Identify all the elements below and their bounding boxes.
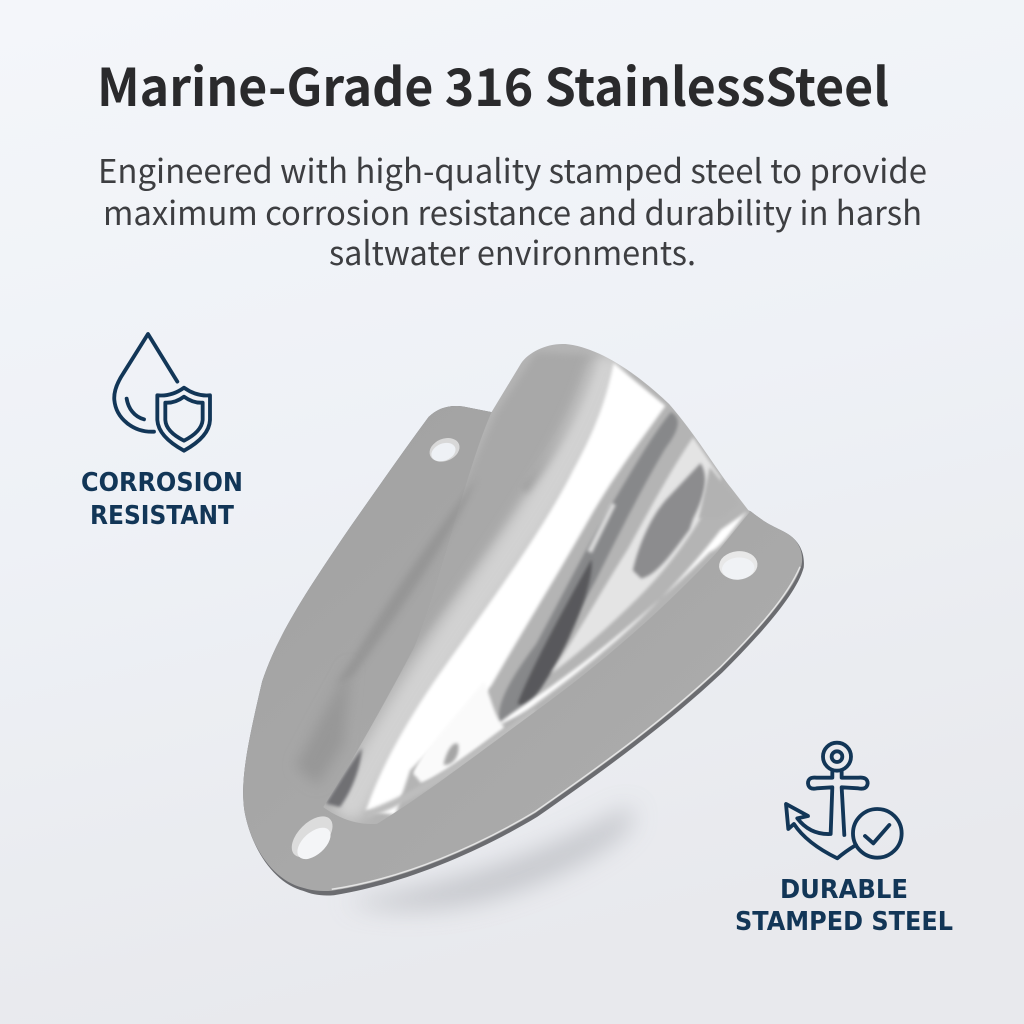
product photo: stainless steel clam vent [243, 330, 804, 909]
grey right flank [698, 467, 720, 519]
plate [243, 406, 802, 891]
white streak in channel [590, 504, 614, 552]
lower white band and tongue [414, 511, 748, 774]
icon: anchor with check [786, 743, 902, 858]
plate edge [243, 406, 804, 896]
bottom-left dark crease [326, 748, 362, 807]
label: durable stamped steel [735, 875, 953, 937]
light inner ridge [551, 437, 721, 674]
lower silver rim of hump [366, 711, 536, 815]
label: durable stamped steel: DURABLE [780, 875, 908, 905]
left shoulder shading [415, 354, 590, 646]
pale band [351, 371, 606, 803]
description text: saltwater environments. [329, 227, 696, 275]
white rim along lower edge [332, 567, 800, 889]
infographic canvas [82, 64, 952, 936]
darkest channel core [517, 559, 592, 705]
mounting hole bottom [284, 809, 340, 865]
tip reflection [443, 743, 459, 765]
soft dark area on the lower left plate [295, 663, 351, 785]
feature: corrosion resistant [81, 334, 243, 531]
description text [98, 145, 927, 275]
label: corrosion resistant: CORROSION [81, 468, 243, 498]
main white highlight [366, 363, 665, 815]
soft grey crease beside highlight [524, 456, 551, 492]
label: durable stamped steel: STAMPED STEEL [735, 907, 953, 937]
title: Marine-Grade 316 StainlessSteel [97, 46, 889, 121]
ground shadow [344, 807, 633, 909]
dark inner channel [499, 412, 678, 723]
mounting hole top [426, 434, 463, 466]
left soft shadow on plate [337, 478, 477, 685]
lower tongue fill [414, 681, 504, 783]
hump [324, 344, 750, 824]
mounting hole right [718, 550, 759, 581]
icon: water drop with shield [114, 334, 210, 451]
description text: maximum corrosion resistance and durability in harsh [103, 187, 922, 235]
label: corrosion resistant [81, 468, 243, 531]
label: corrosion resistant: RESISTANT [90, 501, 234, 531]
feature: durable stamped steel [735, 743, 953, 937]
dark reflection [633, 463, 705, 579]
description text: Engineered with high-quality stamped steel to provide [98, 145, 927, 193]
